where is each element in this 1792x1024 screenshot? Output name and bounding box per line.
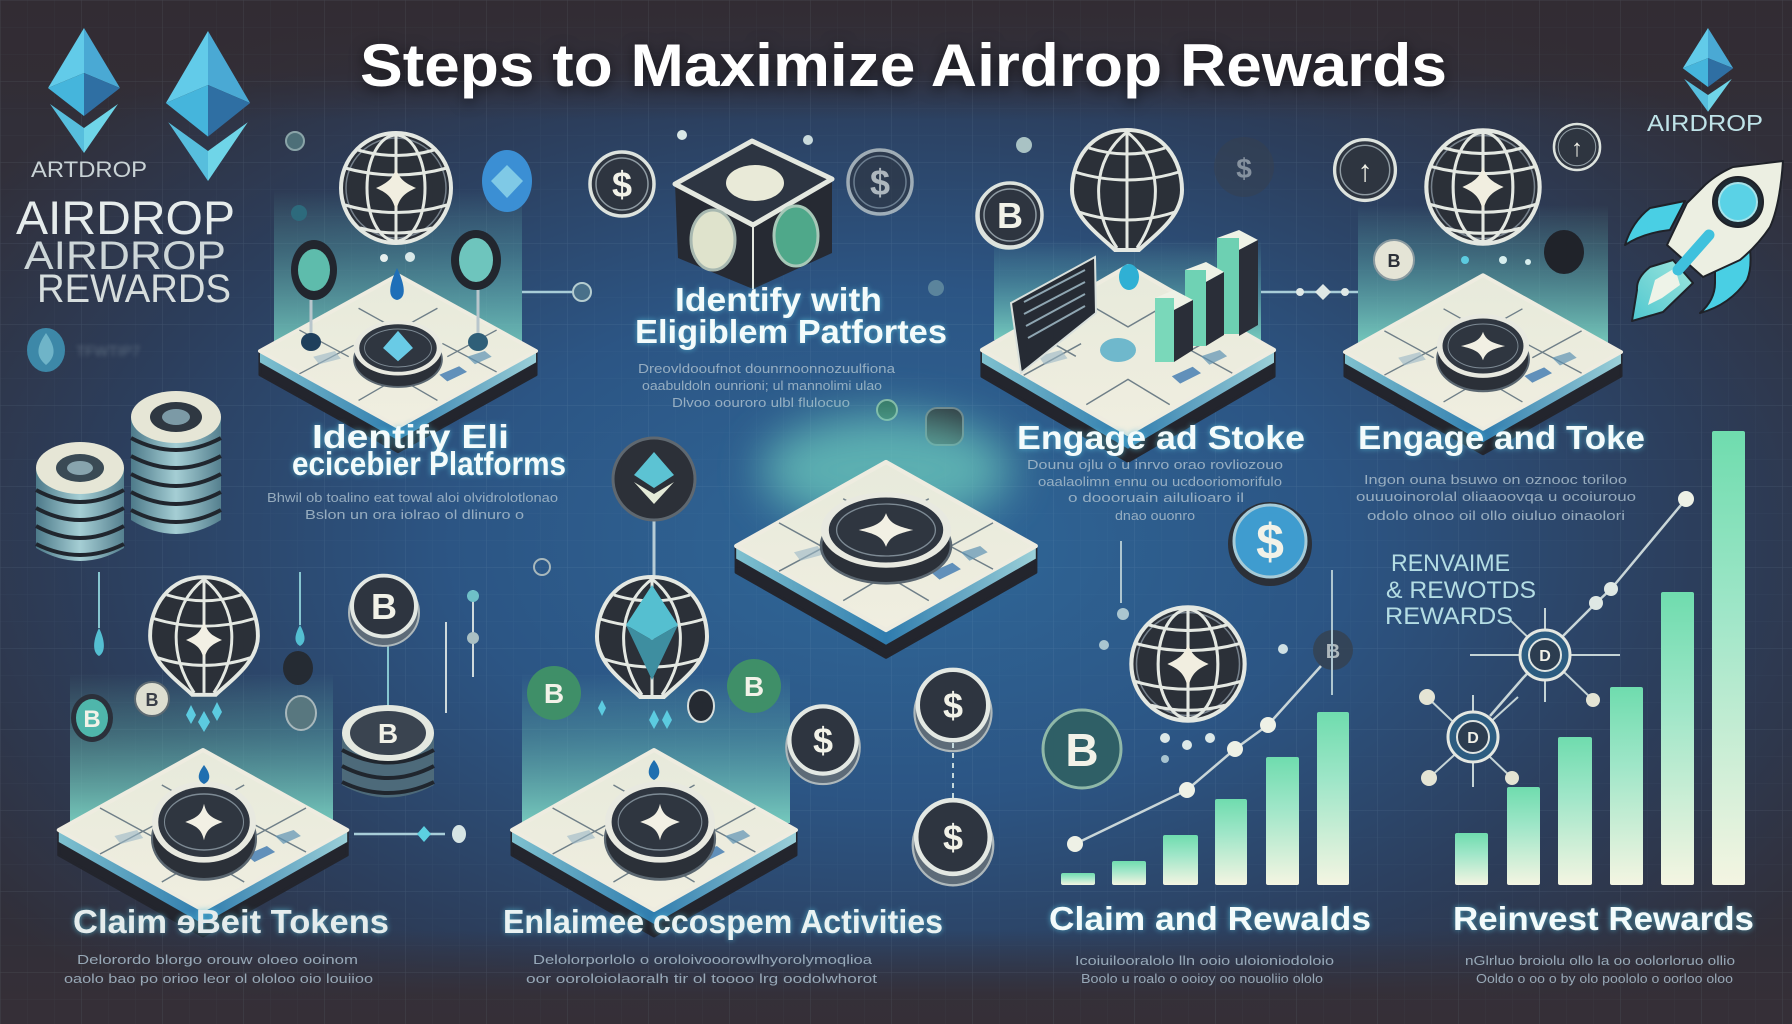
tokens and droplets: B (83, 706, 101, 733)
large coin (821, 492, 951, 583)
tokens and droplets: B (146, 690, 158, 710)
description: oaabuldoln ounrioni; ul mannolimi ulao (642, 378, 882, 393)
description: Dlvoo oouroro ulbl flulocuo (672, 395, 850, 410)
glow (274, 190, 522, 360)
ethereum badge and stem (613, 438, 695, 580)
description: Dounu ojlu o u inrvo orao rovliozouo (1027, 457, 1283, 472)
heading: Identify with (675, 281, 882, 318)
icon: coin stack left (36, 442, 124, 561)
globe (1131, 607, 1245, 721)
glow (1358, 205, 1608, 345)
small airdrop label: ARTDROP (31, 157, 147, 182)
icon: rocket (1625, 161, 1783, 321)
dollar coins: $ (943, 817, 963, 858)
coins (978, 137, 1274, 247)
chart label: & REWOTDS (1386, 577, 1536, 604)
heading (635, 281, 947, 350)
glow (70, 673, 333, 823)
coins: B (996, 196, 1022, 237)
tokens and droplets (71, 572, 388, 784)
tokens: B (544, 678, 564, 709)
green bitcoin coin: B (1065, 724, 1099, 776)
connector (1261, 284, 1358, 300)
tokens (527, 559, 781, 780)
dollar coins: $ (943, 685, 963, 726)
dollar coins: $ (813, 720, 833, 761)
description (1356, 472, 1636, 523)
description: Icoiuilooralolo lln ooio uloioniodoloio (1075, 953, 1334, 968)
heading: Claim ɘBeit Tokens (73, 903, 389, 940)
green bitcoin coin (1043, 710, 1121, 788)
gem pins (286, 132, 501, 351)
coin stack: B (378, 718, 398, 749)
trend line (1067, 666, 1321, 852)
description (267, 490, 558, 522)
coin (605, 781, 715, 879)
dark board (1011, 257, 1096, 373)
heading: Reinvest Rewards (1453, 900, 1754, 937)
description (1027, 457, 1283, 523)
panel: airdrop logo block (16, 28, 250, 561)
heading: Claim and Rewalds (1049, 900, 1371, 937)
heading: Eligiblem Patfortes (635, 313, 947, 350)
description: o doooruain ailulioaro il (1068, 490, 1244, 505)
description: Ooldo o oo o by olo poololo o oorloo oloo (1476, 971, 1733, 986)
heading: ecicebier Platforms (292, 445, 566, 482)
heading: airdrop rewards: AIRDROP (24, 234, 226, 278)
description (638, 361, 896, 410)
heading: Engage ad Stoke (1017, 419, 1305, 456)
coins: B (997, 195, 1023, 236)
chart label: RENVAIME (1391, 550, 1510, 577)
network nodes and trend line (1419, 491, 1694, 787)
blue dollar coin: $ (1256, 514, 1284, 570)
floating tokens: ↑ (1358, 155, 1372, 188)
coin (1437, 314, 1529, 391)
tokens: B (744, 671, 764, 702)
connector (522, 283, 591, 301)
icon: coin stack right (131, 391, 221, 534)
panel: step identify with eligible platforms centre (590, 130, 1041, 445)
panel: step claim tokens (59, 572, 479, 986)
bar chart (1061, 712, 1349, 885)
isometric platform (59, 750, 347, 936)
coin (152, 781, 256, 879)
isometric platform (982, 266, 1274, 461)
blue dollar coin (1228, 502, 1312, 586)
description: oaolo bao po orioo leor ol ololoo oio louiioo (64, 971, 373, 986)
heading: airdrop rewards: AIRDROP (16, 191, 235, 244)
icon: ethereum diamond left (48, 28, 120, 153)
gem (1100, 264, 1139, 362)
heading: Identify Eli (312, 418, 509, 455)
top-right airdrop label: AIRDROP (1647, 110, 1763, 136)
description: Delolorporlolo o oroloivooorowlhyorolymoqlioa (533, 952, 873, 967)
floating tokens (1335, 124, 1600, 280)
globe with gem (597, 577, 707, 697)
coins: $ (870, 162, 890, 203)
coins (590, 130, 1041, 445)
icon: ethereum diamond right (166, 31, 250, 181)
dim coin and droplets (1099, 541, 1353, 763)
3D bars (1155, 230, 1258, 362)
coin stack (342, 576, 479, 798)
description: oor ooroloiolaoralh tir ol toooo lrg oodolwhorot (526, 971, 878, 986)
description (1075, 953, 1334, 986)
description: Dreovldooufnot dounrnoonnozuulfiona (638, 361, 896, 376)
panel: claim rewards chart (1043, 502, 1371, 986)
panel: central platform (613, 415, 1036, 657)
description: Delorordo blorgo orouw oloeo ooinom (77, 952, 358, 967)
isometric platform (260, 275, 536, 452)
heading: Enlaimee ccospem Activities (503, 903, 943, 940)
description: Bhwil ob toalino eat towal aloi olvidrolotlonao (267, 490, 558, 505)
glow (522, 673, 790, 823)
bar chart (1455, 431, 1745, 885)
globe (1426, 130, 1540, 244)
network nodes and trend line: D (1467, 730, 1479, 747)
description: Bslon un ora iolrao ol dlinuro o (305, 507, 524, 522)
floating tokens: ↑ (1571, 135, 1583, 162)
panel: step engage and token (1335, 124, 1645, 523)
isometric platform (512, 750, 796, 936)
description: Boolo u roalo o ooioy oo nouoliio ololo (1081, 971, 1323, 986)
description: Ingon ouna bsuwo on oznooc toriloo (1364, 472, 1627, 487)
chart label: REWARDS (1385, 603, 1513, 630)
heading: airdrop rewards (16, 191, 235, 311)
panel: step ecosystem activities (503, 559, 993, 986)
coins: $ (612, 164, 632, 205)
connector (354, 825, 466, 843)
isometric platform (736, 462, 1036, 657)
coin stack: B (371, 586, 397, 627)
glow (761, 415, 1011, 525)
description (1465, 953, 1735, 986)
dim coin and droplets: B (1326, 641, 1340, 663)
blue gem (482, 150, 532, 212)
coin with gem (354, 320, 442, 387)
description: dnao ouonro (1115, 508, 1195, 523)
star inside globe (186, 619, 222, 661)
chart label (1385, 550, 1536, 630)
heading (292, 418, 566, 482)
icon: top-right ethereum (1683, 28, 1733, 112)
network nodes and trend line: D (1539, 648, 1551, 665)
icon: blurred drop (27, 328, 140, 372)
panel: reinvest rewards chart (1385, 431, 1754, 986)
cube (675, 141, 832, 289)
description (64, 952, 373, 986)
description: odolo olnoo oil ollo oiuluo oinaolori (1367, 508, 1625, 523)
icon: blurred drop: TFWTIP7 (76, 343, 140, 360)
title: Steps to Maximize Airdrop Rewards (360, 32, 1447, 99)
heading: Engage and Toke (1358, 419, 1645, 456)
isometric platform (1345, 275, 1621, 454)
globe (1072, 130, 1182, 250)
panel: step identify eligible platforms left (260, 132, 591, 522)
description: ouuuoinorolal oliaaoovqa u ocoiurouo (1356, 489, 1636, 504)
description: nGlrluo broiolu ollo la oo oolorloruo ollio (1465, 953, 1735, 968)
globe (341, 133, 451, 243)
heading: airdrop rewards: REWARDS (37, 267, 231, 311)
coins: $ (1236, 153, 1252, 184)
globe (150, 577, 258, 695)
floating tokens: B (1388, 251, 1400, 271)
description: oaalaolimn ennu ou ucdooriomorifulo (1038, 474, 1282, 489)
description (526, 952, 878, 986)
dollar coins (786, 670, 993, 885)
glow (994, 240, 1261, 340)
panel: step engage and stake (978, 130, 1358, 523)
